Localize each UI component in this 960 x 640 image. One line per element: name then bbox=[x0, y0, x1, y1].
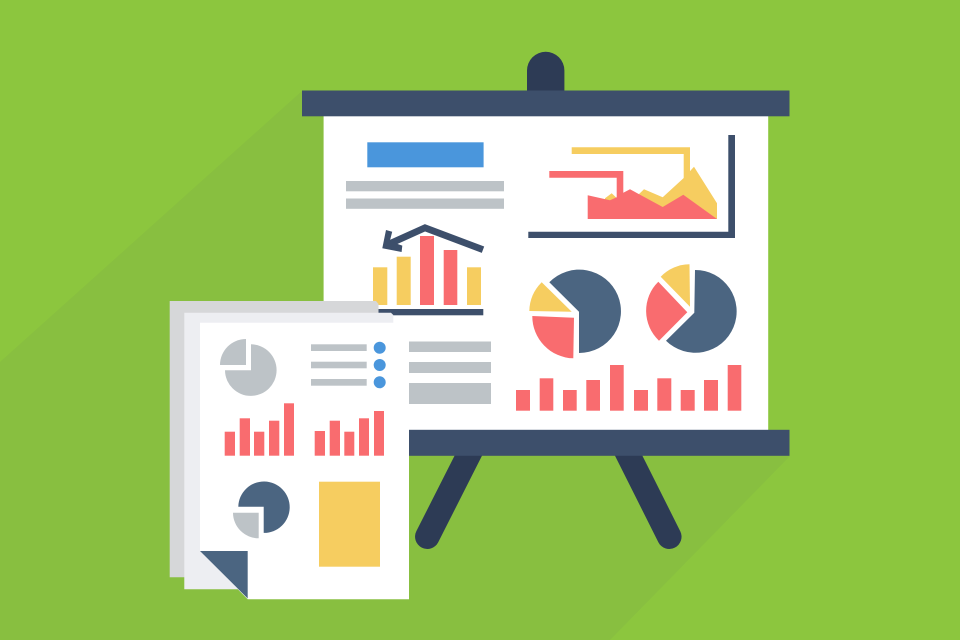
bar chart left bbox=[225, 403, 294, 456]
chart axes bbox=[528, 135, 735, 238]
blue pie chart bbox=[233, 482, 290, 538]
chart baseline bbox=[375, 309, 483, 315]
bar chart right bbox=[315, 411, 384, 456]
yellow area series bbox=[572, 147, 717, 219]
front sheet bbox=[200, 323, 409, 599]
legend lines bbox=[311, 344, 367, 386]
pie chart right bbox=[646, 264, 737, 353]
text lines: right of sheet bbox=[405, 342, 491, 404]
top bar bbox=[302, 90, 790, 116]
heading block bbox=[367, 142, 484, 167]
legend dots bbox=[374, 342, 386, 388]
gray pie chart bbox=[220, 339, 277, 396]
icon: board hook bbox=[527, 52, 564, 92]
bottom bar bbox=[302, 430, 790, 456]
easel legs bbox=[427, 445, 669, 537]
middle sheet bbox=[184, 313, 393, 589]
back sheet bbox=[170, 301, 378, 577]
document stack bbox=[170, 301, 409, 599]
icon: folded corner bbox=[200, 551, 248, 598]
presentation board bbox=[302, 52, 790, 537]
text lines: heading bbox=[346, 181, 504, 209]
bar chart with arrow bbox=[373, 228, 483, 315]
yellow block bbox=[319, 482, 380, 567]
pie chart left bbox=[529, 270, 621, 358]
area chart bbox=[528, 135, 735, 238]
projection screen bbox=[324, 112, 768, 432]
icon: trend arrow bbox=[382, 228, 483, 252]
bar chart bottom bbox=[516, 365, 741, 411]
bars bbox=[373, 236, 481, 305]
red area series bbox=[549, 171, 717, 219]
